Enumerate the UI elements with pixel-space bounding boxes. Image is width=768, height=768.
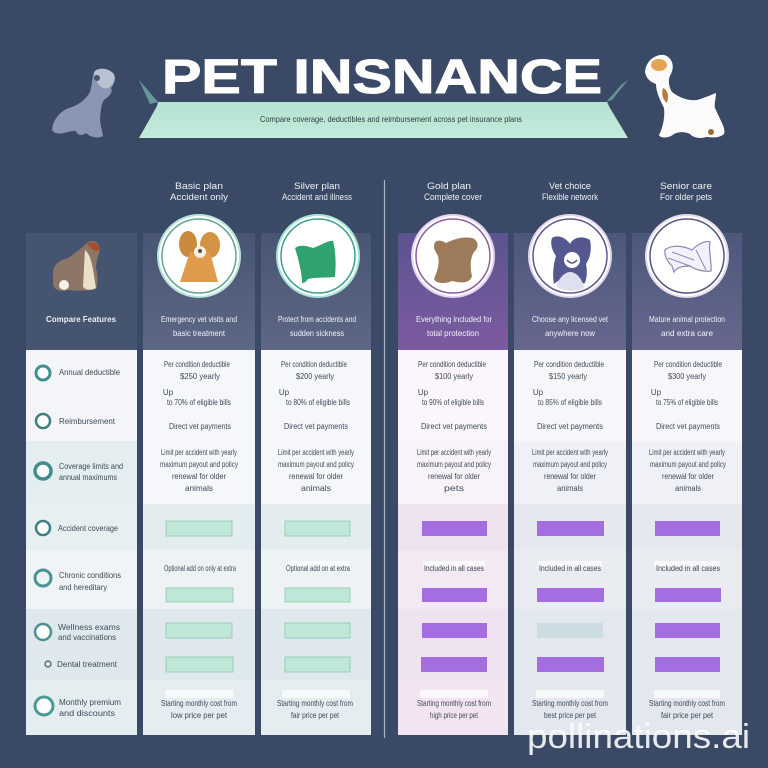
illness note: Included in all cases [656, 564, 720, 573]
icon: brown dog [53, 241, 100, 291]
plan name [660, 181, 712, 202]
plan details: maximum payout and policy [278, 460, 354, 469]
price note: fair price per pet [661, 711, 714, 720]
plan details: animals [301, 484, 331, 493]
row label: coverage limits: Coverage limits and [59, 462, 123, 471]
plan summary: anywhere now [545, 328, 596, 338]
icon: white cat [645, 55, 724, 138]
column header [398, 233, 508, 350]
plan details: renewal for older [428, 472, 480, 481]
plan details: renewal for older [662, 472, 714, 481]
plan name [282, 181, 352, 202]
plan details: Limit per accident with yearly [417, 448, 491, 457]
price note: Starting monthly cost from [277, 699, 353, 708]
plan details: Per condition deductible [534, 360, 604, 369]
icon: line drawing badge [646, 215, 728, 297]
row label: monthly price: and discounts [59, 709, 115, 718]
plan details: renewal for older [544, 472, 596, 481]
plan summary: sudden sickness [290, 328, 344, 338]
ribbon tail right [606, 80, 628, 102]
illness note [538, 561, 602, 573]
watermark: pollinations.ai [527, 718, 750, 756]
price note [532, 690, 608, 720]
plan details: to 75% of eligible bills [656, 398, 718, 407]
plan name: Complete cover [424, 192, 482, 202]
plan summary: Emergency vet visits and [161, 314, 237, 324]
plan details: Direct vet payments [537, 422, 603, 431]
plan details: Limit per accident with yearly [278, 448, 354, 457]
plan details: $100 yearly [435, 372, 473, 381]
plan details: Up [163, 388, 174, 397]
price note [649, 690, 725, 720]
panel: plan 3 [398, 181, 508, 735]
column header [514, 233, 626, 350]
plan summary: Mature animal protection [649, 314, 725, 324]
row label: monthly price [35, 697, 121, 718]
plan details: Direct vet payments [284, 422, 348, 431]
price note: Starting monthly cost from [161, 699, 237, 708]
row label: monthly price: Monthly premium [59, 698, 121, 707]
plan details: maximum payout and policy [160, 460, 238, 469]
plan name: Senior care [660, 181, 712, 191]
illness note: Included in all cases [424, 564, 484, 573]
panel: plan 4 [514, 181, 626, 735]
rows [632, 350, 742, 735]
column header [143, 233, 255, 350]
price note: Starting monthly cost from [532, 699, 608, 708]
row label: reimbursement [36, 414, 116, 428]
subtitle: Compare coverage, deductibles and reimbursement across pet insurance plans [260, 114, 522, 124]
row label: illness: Chronic conditions [59, 571, 121, 580]
rows [26, 350, 137, 735]
plan summary [416, 314, 492, 338]
plan details: maximum payout and policy [533, 460, 607, 469]
illness note: Optional add on only at extra [164, 564, 236, 573]
plan details: to 80% of eligible bills [286, 398, 350, 407]
plan summary [161, 314, 237, 338]
illness note [423, 561, 485, 573]
rows [261, 350, 371, 735]
plan name: Silver plan [294, 181, 340, 191]
row label: accidents: Accident coverage [58, 524, 118, 533]
heading: ribbon with subtitle [139, 80, 628, 138]
panel: feature column [26, 233, 137, 735]
plan summary: Everything included for [416, 314, 492, 324]
panel: plan 2 [261, 181, 371, 735]
plan details: $200 yearly [296, 372, 334, 381]
row label: accidents [36, 521, 118, 535]
plan details: Limit per accident with yearly [532, 448, 608, 457]
plan details: Up [418, 388, 429, 397]
coverage bars [655, 521, 721, 672]
coverage bars [166, 521, 233, 672]
plan details: Per condition deductible [654, 360, 722, 369]
price note: best price per pet [544, 711, 597, 720]
rows [143, 350, 255, 735]
title: PET INSNANCE [162, 51, 602, 104]
plan name: Basic plan [175, 181, 223, 191]
price note: high price per pet [430, 711, 479, 720]
plan details: Up [533, 388, 544, 397]
plan details: renewal for older [172, 472, 226, 481]
coverage bars [537, 521, 604, 672]
plan details: Up [279, 388, 290, 397]
plan details: Direct vet payments [421, 422, 487, 431]
ribbon body [139, 102, 628, 138]
rows [514, 350, 626, 735]
plan summary [649, 314, 725, 338]
illness note [654, 561, 720, 573]
plan name: Flexible network [542, 192, 598, 202]
plan details [417, 360, 491, 493]
ribbon tail left [139, 80, 158, 104]
row label: wellness [35, 623, 120, 642]
plan details: Per condition deductible [418, 360, 486, 369]
column header [261, 233, 371, 350]
illness note [286, 561, 350, 573]
plan details: Per condition deductible [164, 360, 230, 369]
plan details [278, 360, 354, 493]
row label: illness [35, 570, 121, 592]
price note [161, 690, 237, 720]
illness note: Included in all cases [539, 564, 601, 573]
plan details: animals [185, 484, 213, 493]
icon: green blanket badge [277, 215, 359, 297]
plan details: renewal for older [289, 472, 343, 481]
column header [632, 233, 742, 350]
plan details: $300 yearly [668, 372, 706, 381]
plan summary [532, 314, 609, 338]
plan summary: basic treatment [173, 328, 226, 338]
plan details: animals [675, 484, 701, 493]
price note: fair price per pet [291, 711, 340, 720]
plan details: $150 yearly [549, 372, 587, 381]
row label: deductible: Annual deductible [59, 368, 121, 377]
plan details [649, 360, 726, 493]
plan name: Accident and illness [282, 192, 352, 202]
plan name: For older pets [660, 192, 712, 202]
rows [398, 350, 508, 735]
plan details: maximum payout and policy [650, 460, 726, 469]
row label: wellness: and vaccinations [58, 633, 116, 642]
row label: deductible [36, 366, 121, 380]
plan name: Gold plan [427, 181, 471, 191]
plan summary: Choose any licensed vet [532, 314, 609, 324]
plan summary: and extra care [661, 328, 713, 338]
row label: coverage limits [35, 462, 123, 482]
plan details: animals [557, 484, 583, 493]
plan details: Limit per accident with yearly [161, 448, 237, 457]
plan details: to 85% of eligible bills [538, 398, 602, 407]
plan details: Limit per accident with yearly [649, 448, 725, 457]
illness note: Optional add on at extra [286, 564, 350, 573]
plan summary: total protection [427, 328, 479, 338]
price note [417, 690, 491, 720]
plan details [532, 360, 608, 493]
row label: reimbursement: Reimbursement [59, 417, 116, 426]
plan summary [278, 314, 356, 338]
plan name: Vet choice [549, 181, 591, 191]
plan details: Direct vet payments [169, 422, 231, 431]
panel: plan 1 [143, 181, 255, 735]
coverage bars [421, 521, 487, 672]
panel: plan 5 [632, 181, 742, 735]
plan details: Direct vet payments [656, 422, 720, 431]
plan details: pets [444, 484, 464, 493]
plan details [160, 360, 238, 493]
plan details: to 90% of eligible bills [422, 398, 484, 407]
column header [26, 233, 137, 350]
plan details: $250 yearly [180, 372, 220, 381]
row label: dental: Dental treatment [57, 660, 118, 669]
price note: low price per pet [171, 711, 228, 720]
price note [277, 690, 353, 720]
price note: Starting monthly cost from [649, 699, 725, 708]
plan details: maximum payout and policy [417, 460, 491, 469]
divider [384, 180, 386, 738]
plan name [424, 181, 482, 202]
plan name [542, 181, 598, 202]
plan name [170, 181, 229, 202]
icon: brown bone badge [412, 215, 494, 297]
plan summary: Protect from accidents and [278, 314, 356, 324]
icon: grey dog silhouette [52, 69, 115, 137]
price note: Starting monthly cost from [417, 699, 491, 708]
header label: Compare Features [46, 315, 117, 324]
plan details: Per condition deductible [281, 360, 347, 369]
row label: illness: and hereditary [59, 583, 107, 592]
plan details: to 70% of eligible bills [167, 398, 231, 407]
plan name: Accident only [170, 192, 229, 202]
icon: purple dog badge [529, 215, 611, 297]
row label: coverage limits: annual maximums [59, 473, 117, 482]
row label: wellness: Wellness exams [58, 623, 120, 632]
coverage bars [285, 521, 350, 672]
plan details: Up [651, 388, 662, 397]
icon: orange dog badge [158, 215, 240, 297]
